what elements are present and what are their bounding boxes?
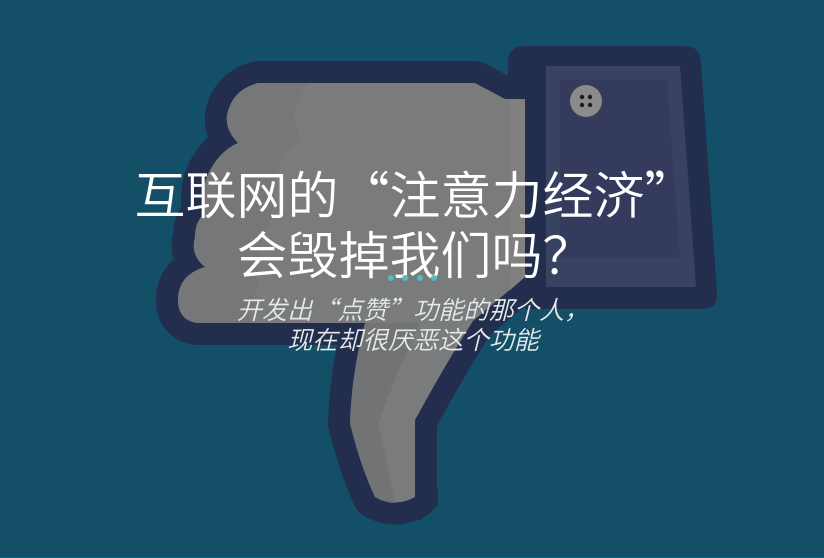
thumb tip outline corner [405, 490, 438, 520]
fist and thumb outline with grey fill [178, 83, 525, 502]
bottom edge line [0, 557, 824, 558]
title: 会毁掉我们吗？ [236, 215, 594, 289]
title: 互联网的“注意力经济” [134, 155, 696, 229]
subtitle: 开发出“点赞”功能的那个人， [237, 291, 589, 327]
subtitle: 现在却很厌恶这个功能 [287, 321, 539, 357]
cuff inner panel [546, 66, 696, 287]
lighter wrist band [510, 99, 525, 290]
subtitle [237, 291, 589, 357]
shirt cuff [508, 46, 717, 309]
cuff button [570, 85, 602, 117]
title [134, 155, 696, 289]
darker finger shading [178, 83, 310, 323]
thumb shading [350, 323, 420, 503]
